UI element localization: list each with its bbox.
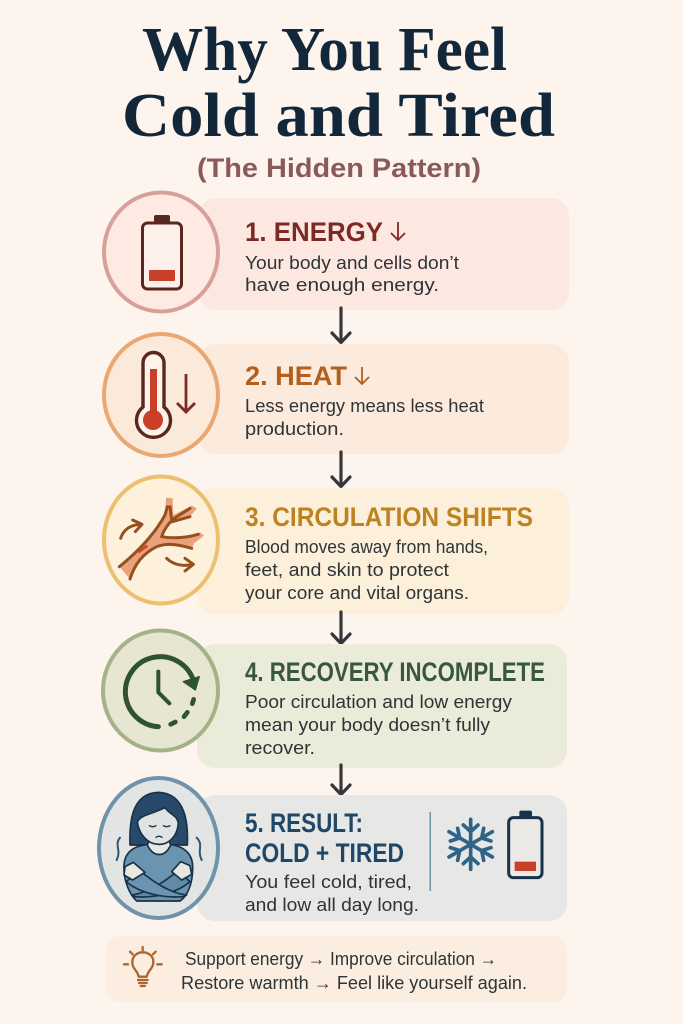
heading: result cold + tired [245,808,404,868]
heading: result cold + tired: 5. RESULT: [245,808,363,838]
text: energy description [245,253,459,295]
text: recovery description: recover. [245,738,315,758]
text: result description [245,872,419,915]
text: recovery description [245,692,512,758]
panel: step 2 heat [104,334,569,456]
icon: blood vessels in circle [104,476,218,604]
divider [430,812,431,891]
text: tip [181,949,527,993]
text: heat description: production. [245,419,344,439]
text: tip: Support energy → Improve circulation → [185,949,497,969]
panel: tip [106,936,567,1002]
icon: light bulb [124,947,162,986]
arrow: step 1 to 2 [332,308,350,342]
title: Why You Feel [142,16,507,84]
text: energy description: Your body and cells don’t [245,253,459,273]
icon: low battery in circle [104,192,218,312]
text: energy description: have enough energy. [245,275,439,295]
text: heat description: Less energy means less heat [245,396,484,416]
heading: energy: 1. ENERGY [245,217,383,247]
title: Cold and Tired [122,82,555,150]
icon: snowflake [449,819,492,869]
arrow: step 3 to 4 [332,612,350,644]
heading: circulation shifts: 3. CIRCULATION SHIFTS [245,502,533,532]
icon: low battery [509,811,542,878]
panel: step 3 circulation [104,476,569,614]
text: tip: Restore warmth → Feel like yourself again. [181,973,527,993]
arrow: step 4 to 5 [332,765,350,794]
title [122,16,555,150]
text: circulation description: your core and vital organs. [245,583,469,603]
text: circulation description: Blood moves away from hands, [245,537,488,557]
text: result description: and low all day long. [245,895,419,915]
heading: recovery incomplete: 4. RECOVERY INCOMPLETE [245,657,545,687]
arrow: step 2 to 3 [332,452,350,486]
heading: result cold + tired: COLD + TIRED [245,838,404,868]
text: recovery description: mean your body doesn’t fully [245,715,490,735]
text: recovery description: Poor circulation and low energy [245,692,512,712]
text: result description: You feel cold, tired, [245,872,412,892]
icon: clock in circle [103,630,218,750]
text: circulation description [245,537,488,603]
text: heat description [245,396,484,439]
icon: thermometer in circle [104,334,218,456]
panel: step 5 result [99,778,567,921]
heading: heat: 2. HEAT [245,361,348,391]
icon: shivering person in circle [99,778,218,918]
panel: step 4 recovery [103,630,567,768]
text: circulation description: feet, and skin to protect [245,560,449,580]
subtitle: (The Hidden Pattern) [197,153,481,183]
panel: step 1 energy [104,192,569,312]
